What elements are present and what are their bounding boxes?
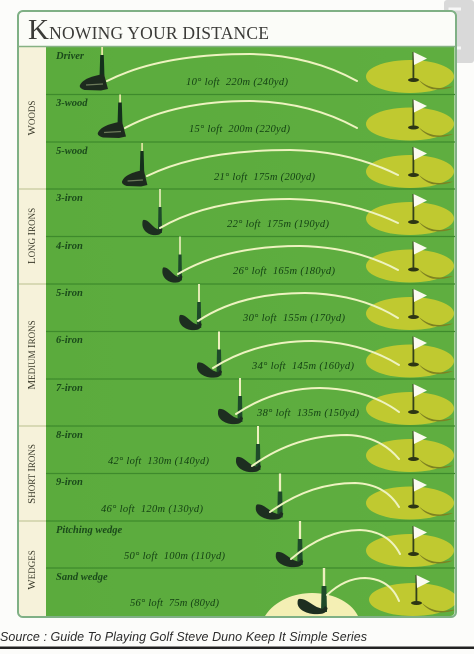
club label: 9-iron [56, 477, 83, 488]
category label: Long Irons: LONG IRONS [26, 208, 38, 264]
club label: 6-iron [56, 335, 83, 346]
ball flight arc [327, 578, 399, 601]
club head [236, 426, 261, 472]
row: 3-wood [55, 94, 454, 140]
category label: Short Irons: SHORT IRONS [26, 444, 38, 504]
distance text: 56° loft 75m (80yd) [130, 598, 220, 609]
club head [80, 47, 108, 90]
row: Pitching wedge [56, 521, 454, 567]
distance text: 15° loft 200m (220yd) [189, 124, 290, 135]
row: 4-iron [55, 236, 454, 283]
row: 5-iron [56, 284, 454, 330]
ball flight arc [270, 483, 399, 512]
ball flight arc [291, 530, 400, 559]
distance text: 46° loft 120m (130yd) [101, 504, 204, 515]
putting green and flag [369, 575, 457, 616]
distance text: 50° loft 100m (110yd) [124, 551, 226, 562]
club label: 3-wood [55, 98, 88, 109]
club head [256, 474, 283, 520]
corner scan artefact [444, 0, 474, 63]
ball flight arc [213, 341, 399, 368]
category label: Medium Irons: MEDIUM IRONS [26, 320, 38, 390]
ball flight arc [178, 246, 398, 274]
distance text: 38° loft 135m (150yd) [256, 408, 360, 419]
club label: 5-wood [56, 146, 88, 157]
club head [197, 332, 222, 378]
club head [179, 284, 202, 330]
club label: Sand wedge [56, 572, 108, 583]
title: KNOWING YOUR DISTANCE [28, 14, 269, 46]
putting green and flag [366, 431, 454, 472]
putting green and flag [366, 289, 454, 330]
distance text: 30° loft 155m (170yd) [242, 313, 346, 324]
putting green and flag [366, 336, 454, 378]
putting green and flag [366, 526, 454, 567]
distance text: 22° loft 175m (190yd) [227, 219, 330, 230]
row: 5-wood [56, 143, 454, 188]
club label: 8-iron [56, 430, 83, 441]
row: 7-iron [56, 378, 454, 425]
club label: 3-iron [55, 193, 83, 204]
category label: Woods: WOODS [26, 101, 38, 135]
club head [162, 236, 182, 283]
distance text: 34° loft 145m (160yd) [251, 361, 354, 372]
putting green and flag [366, 147, 454, 188]
putting green and flag [366, 100, 454, 140]
putting green and flag [366, 478, 454, 520]
row: Driver [55, 47, 454, 93]
row: 3-iron [55, 189, 454, 235]
row: 9-iron [56, 474, 454, 520]
distance text: 10° loft 220m (240yd) [186, 77, 288, 88]
category label: Wedges: WEDGES [26, 550, 38, 590]
putting green and flag [366, 52, 454, 93]
club label: Driver [55, 51, 85, 62]
bottom rule [0, 646, 474, 649]
row: Sand wedge [56, 568, 457, 616]
sand bunker [265, 593, 358, 616]
putting green and flag [366, 194, 454, 235]
row: 6-iron [56, 332, 454, 378]
ball flight arc [198, 293, 398, 321]
club head [98, 94, 126, 138]
distance text: 42° loft 130m (140yd) [108, 456, 210, 467]
ball flight arc [252, 435, 399, 466]
source line: Source : Guide To Playing Golf Steve Duno Keep It Simple Series [0, 630, 367, 644]
ball flight arc [107, 54, 357, 81]
fairway background [46, 47, 455, 616]
club head [122, 143, 147, 186]
club head [298, 568, 328, 614]
club label: 5-iron [56, 288, 83, 299]
distance text: 26° loft 165m (180yd) [233, 266, 336, 277]
club label: Pitching wedge [56, 525, 123, 536]
club label: 4-iron [55, 241, 83, 252]
category column [19, 47, 46, 616]
club head [142, 189, 162, 235]
distance text: 21° loft 175m (200yd) [214, 172, 316, 183]
ball flight arc [160, 199, 398, 228]
club head [218, 378, 243, 424]
ball flight arc [125, 101, 357, 128]
club head [276, 521, 303, 567]
row: 8-iron [56, 426, 454, 472]
putting green and flag [366, 242, 454, 282]
putting green and flag [366, 384, 454, 425]
ball flight arc [236, 388, 399, 414]
club label: 7-iron [56, 383, 83, 394]
ball flight arc [147, 150, 398, 176]
